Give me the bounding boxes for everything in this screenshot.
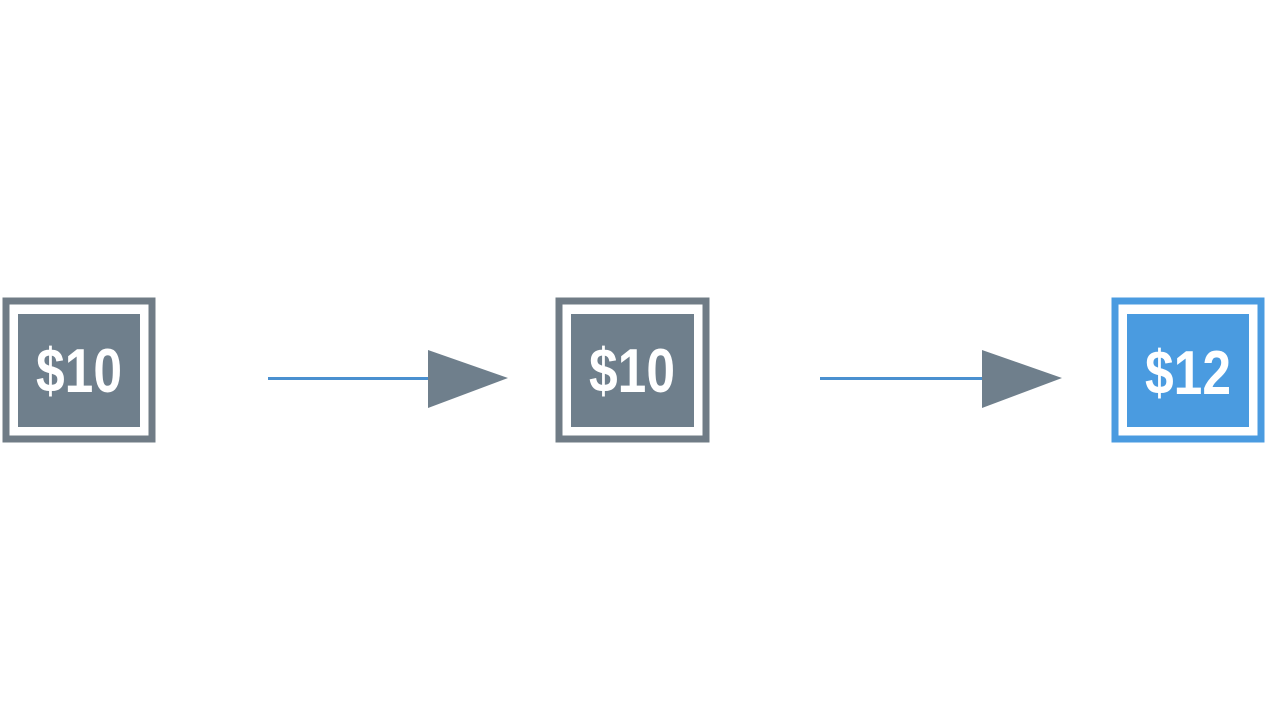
box: $10 second: $10 bbox=[589, 337, 675, 406]
arrow: second bbox=[820, 350, 1062, 408]
box: $10 first bbox=[6, 301, 152, 439]
arrow: first bbox=[268, 350, 508, 408]
box: $10 first: $10 bbox=[36, 337, 122, 406]
box: $10 second bbox=[559, 301, 706, 439]
box: $12 bbox=[1115, 301, 1261, 439]
box: $12: $12 bbox=[1145, 339, 1231, 408]
